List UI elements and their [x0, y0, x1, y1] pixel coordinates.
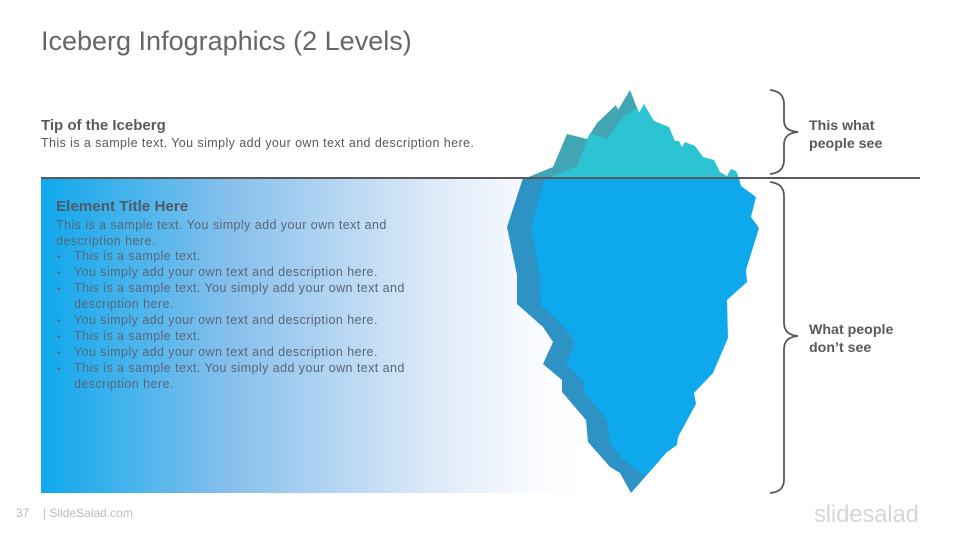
logo wordmark: slidesalad [814, 501, 919, 528]
label: what people don't see: don’t see [809, 340, 871, 356]
bracket: above water [770, 90, 798, 174]
panel text: element details [56, 198, 405, 391]
label: what people don't see: What people [809, 322, 893, 338]
label: what people don't see [809, 322, 893, 356]
text block: intro: This is a sample text. You simply add your own text and [56, 218, 387, 232]
title: Iceberg Infographics (2 Levels) [41, 26, 412, 56]
iceberg underwater shadow [507, 178, 660, 493]
heading: element title: Element Title Here [56, 198, 188, 215]
page number: 37 [16, 506, 29, 520]
bullet list: This is a sample text. [74, 249, 201, 263]
bullet list: This is a sample text. You simply add your own text and [74, 281, 405, 295]
bullet list [57, 249, 405, 391]
bullet list: This is a sample text. You simply add your own text and [74, 361, 405, 375]
text block: intro: description here. [56, 234, 156, 248]
iceberg tip shadow [526, 90, 640, 178]
panel: gradient below water [41, 178, 641, 493]
label: this what people see: This what [809, 118, 874, 134]
water line [41, 177, 920, 179]
bullet list: description here. [74, 377, 174, 391]
bullet list: description here. [74, 297, 174, 311]
bullet list: This is a sample text. [74, 329, 201, 343]
bracket: below water [770, 182, 798, 493]
bullet list: You simply add your own text and description here. [74, 345, 378, 359]
text block: intro [56, 218, 387, 248]
label: this what people see: people see [809, 136, 882, 152]
label: this what people see [809, 118, 882, 152]
text block: tip description: This is a sample text. You simply add your own text and description here. [41, 136, 474, 150]
bullet list: You simply add your own text and description here. [74, 265, 378, 279]
iceberg tip front [548, 104, 739, 178]
heading: tip of the iceberg: Tip of the Iceberg [41, 117, 166, 134]
footer source: | SlideSalad.com [43, 506, 133, 520]
bullet list: You simply add your own text and description here. [74, 313, 378, 327]
iceberg underwater front [531, 178, 759, 476]
